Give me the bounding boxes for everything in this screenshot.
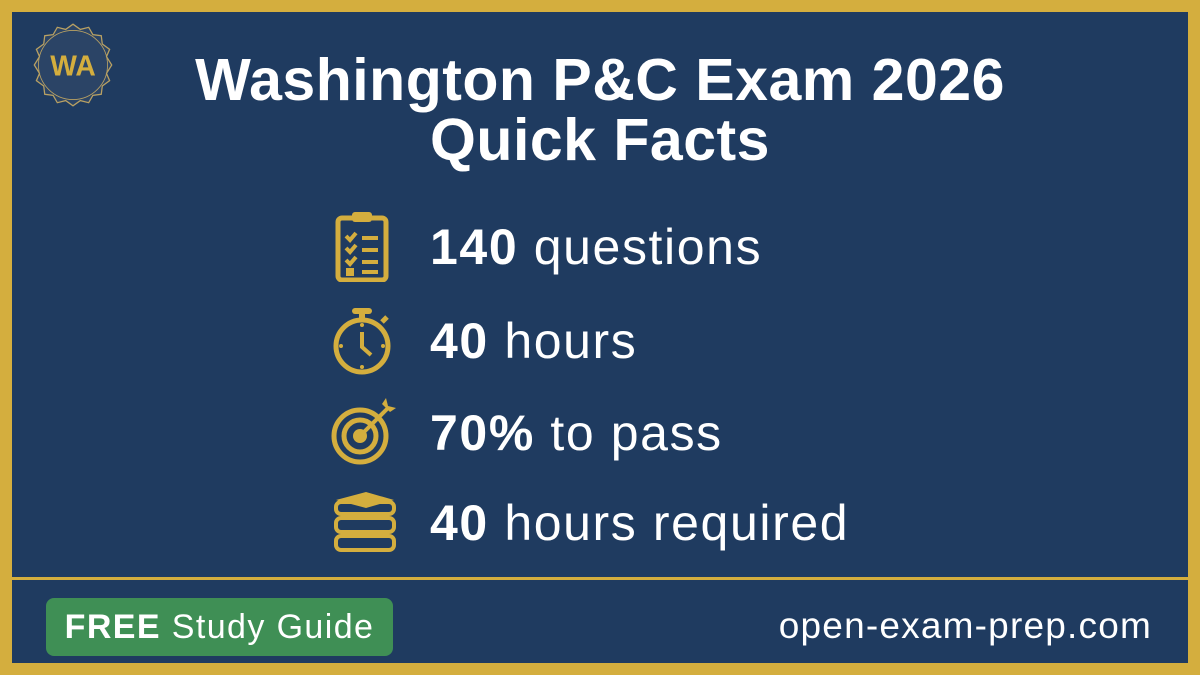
badge: WA seal: WA <box>50 49 96 81</box>
fact: pass <box>332 398 723 464</box>
icon: books <box>334 492 396 552</box>
badge: WA seal <box>34 24 112 106</box>
title <box>195 47 1005 173</box>
fact: hours: 40 hours <box>430 313 637 369</box>
title: Quick Facts <box>430 107 770 173</box>
icon: stopwatch <box>334 308 390 374</box>
fact: questions: 140 questions <box>430 219 762 275</box>
footer url: open-exam-prep.com <box>779 605 1152 646</box>
fact: hours <box>334 308 637 374</box>
icon: target <box>332 398 396 464</box>
fact: questions <box>336 212 762 282</box>
title: Washington P&C Exam 2026 <box>195 47 1005 113</box>
fact: pass: 70% to pass <box>430 405 723 461</box>
divider line <box>12 577 1188 580</box>
fact: required: 40 hours required <box>430 495 849 551</box>
button: FREE Study Guide: FREE Study Guide <box>65 608 374 646</box>
button: FREE Study Guide <box>46 598 393 656</box>
icon: clipboard <box>336 212 388 282</box>
